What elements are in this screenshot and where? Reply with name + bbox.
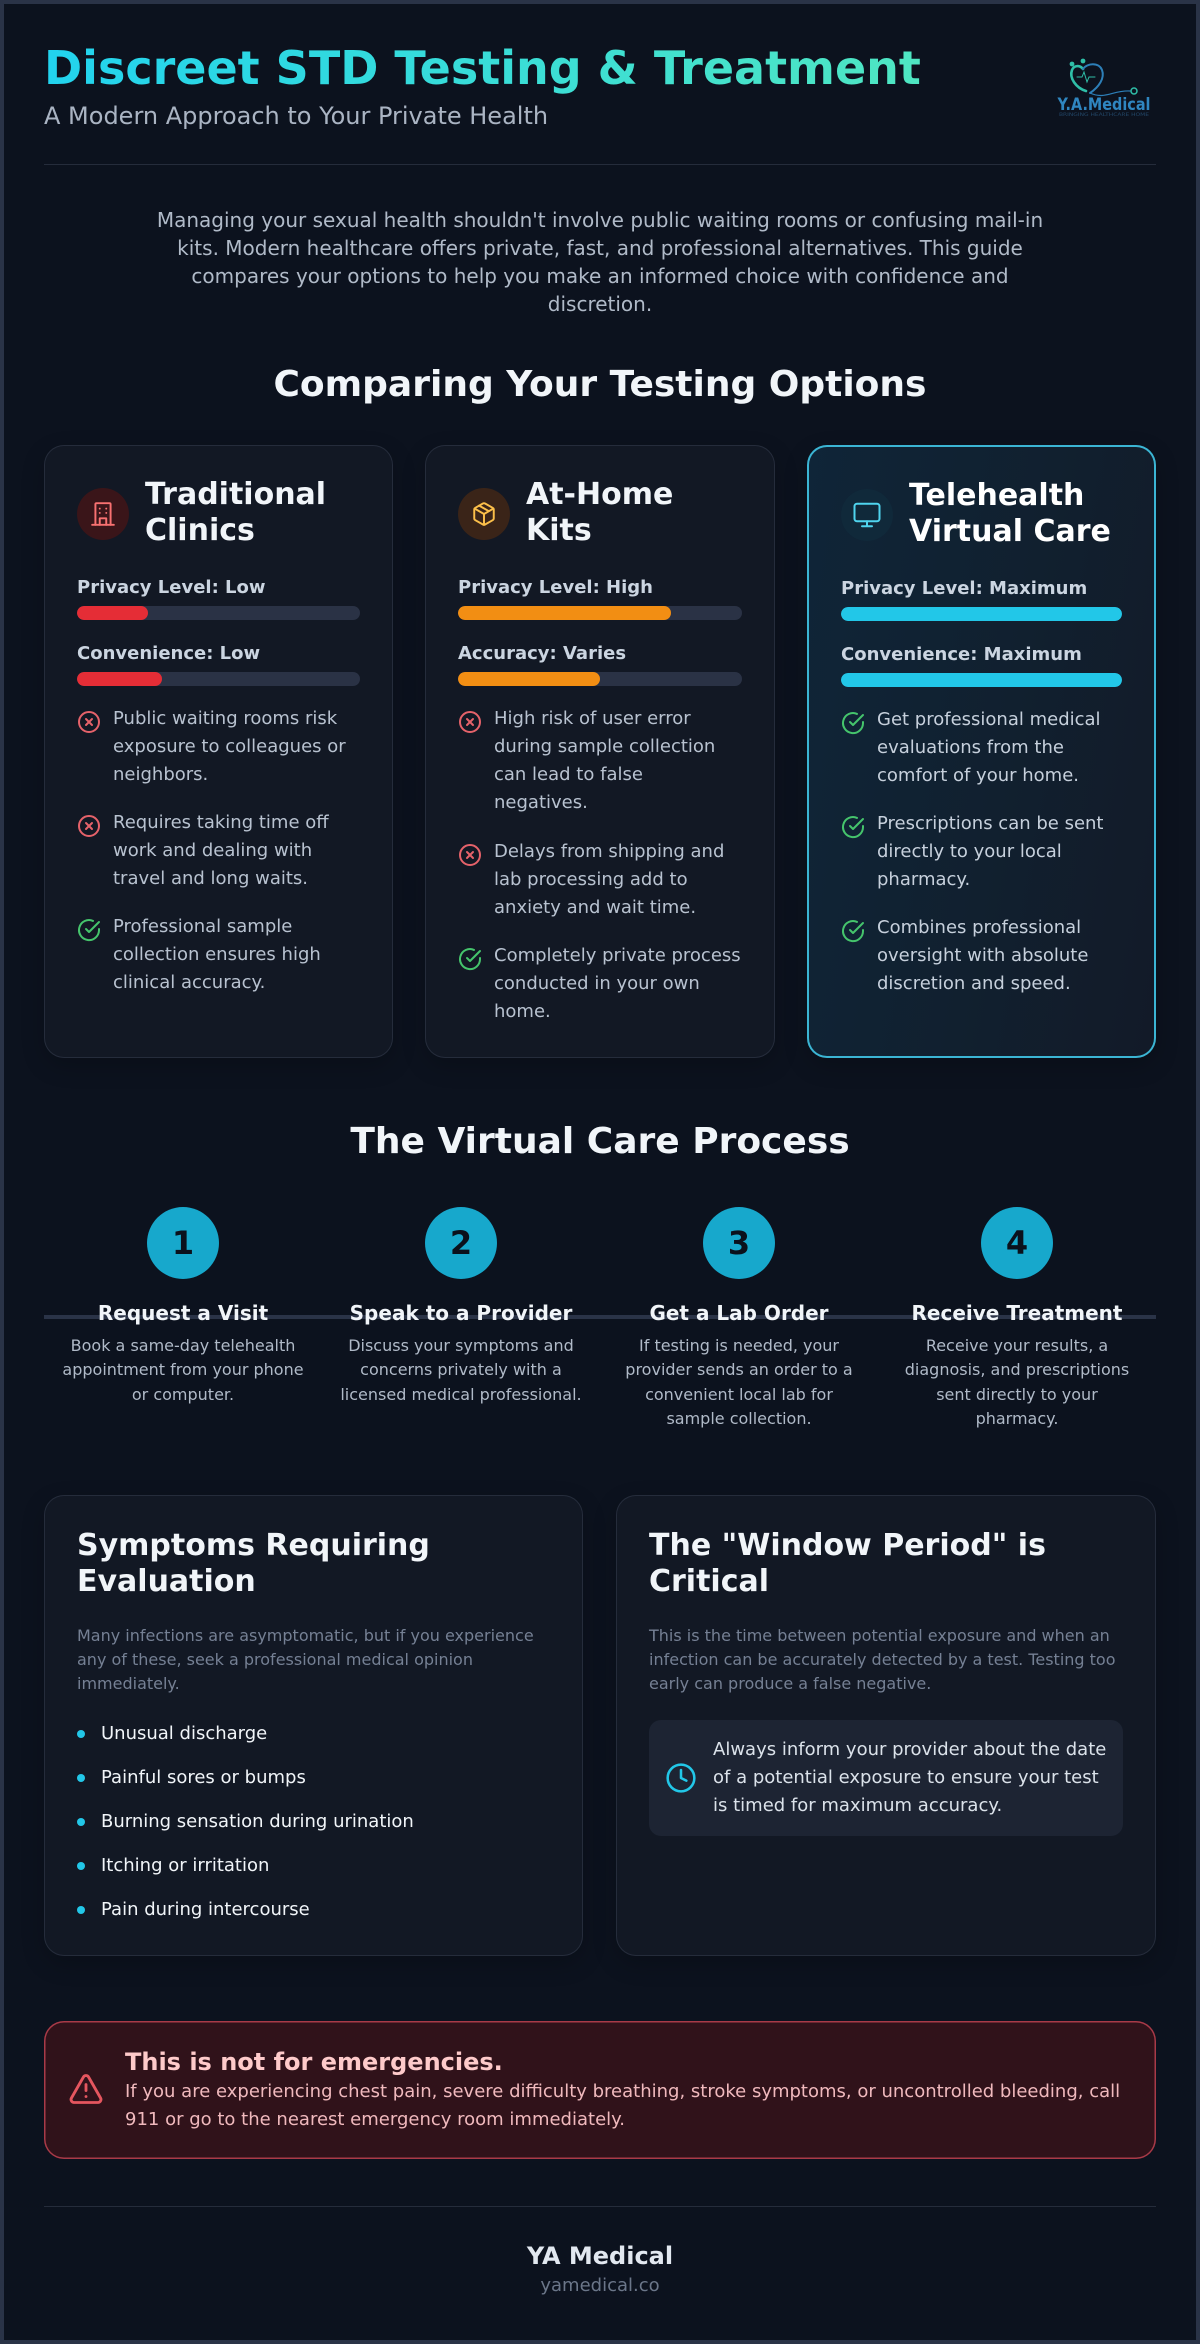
logo (1057, 58, 1150, 117)
point text: evaluations from the (877, 736, 1064, 758)
panel description: early can produce a false negative. (649, 1674, 931, 1693)
step 4 number: 4 (1006, 1224, 1028, 1262)
process connector line (44, 1315, 1156, 1319)
step 4 number (981, 1207, 1053, 1279)
point text: Combines professional (877, 916, 1081, 938)
icon: clinic building (77, 488, 129, 540)
panel: at-home kits (425, 445, 775, 1058)
panel description: This is the time between potential exposure and when an (649, 1626, 1110, 1645)
symptom bullet (77, 1818, 85, 1826)
icon: cross (78, 711, 100, 733)
step 2 description: concerns privately with a (360, 1360, 562, 1379)
point text: Get professional medical (877, 708, 1101, 730)
step 1 description: appointment from your phone (62, 1360, 304, 1379)
step 3 title: Get a Lab Order (649, 1301, 829, 1325)
card title (909, 478, 1111, 549)
point text (494, 944, 741, 1022)
panel description (77, 1626, 534, 1693)
point text (494, 840, 724, 918)
step 2 number: 2 (450, 1224, 472, 1262)
point text (877, 812, 1104, 890)
point text: oversight with absolute (877, 944, 1088, 966)
rating bar: privacy (458, 606, 742, 620)
symptom bullet (77, 1774, 85, 1782)
icon: monitor (841, 489, 893, 541)
header title: Discreet STD Testing & Treatment (44, 41, 921, 95)
callout text: Always inform your provider about the date (713, 1738, 1106, 1760)
step 2 description: licensed medical professional. (340, 1385, 582, 1404)
rating bar: privacy (77, 606, 360, 620)
panel heading: The "Window Period" is (649, 1528, 1046, 1562)
card title: Kits (526, 513, 592, 548)
point text (113, 812, 329, 888)
step 3 description: provider sends an order to a (625, 1360, 853, 1379)
intro paragraph (157, 208, 1043, 316)
step 4 description: Receive your results, a (926, 1336, 1108, 1355)
point text (113, 708, 346, 784)
panel heading (649, 1528, 1046, 1598)
step 1 description (62, 1336, 304, 1404)
step 3 number: 3 (728, 1224, 750, 1262)
symptom text: Painful sores or bumps (101, 1766, 306, 1788)
point text: clinical accuracy. (113, 972, 265, 992)
icon: cross (78, 815, 100, 837)
point text (877, 916, 1088, 994)
panel description: infection can be accurately detected by a test. Testing too (649, 1650, 1116, 1669)
rating bar: privacy (841, 607, 1122, 621)
footer url: yamedical.co (540, 2275, 660, 2296)
heading: process: The Virtual Care Process (350, 1121, 850, 1162)
icon: cross (459, 711, 481, 733)
panel description (648, 1626, 1116, 1693)
callout text (713, 1738, 1106, 1816)
symptom bullet (77, 1906, 85, 1914)
rating label: privacy: Privacy Level: High (458, 577, 653, 598)
point text: home. (494, 1000, 551, 1022)
step 4 description (905, 1336, 1129, 1428)
intro paragraph: Managing your sexual health shouldn't involve public waiting rooms or confusing mail-in (157, 208, 1043, 232)
intro paragraph: kits. Modern healthcare offers private, fast, and professional alternatives. This guide (177, 236, 1023, 260)
heading: comparing options: Comparing Your Testing Options (274, 364, 926, 405)
footer brand: YA Medical (527, 2242, 673, 2270)
point text: collection ensures high (113, 944, 321, 964)
alert text (125, 2081, 1120, 2130)
step 1 description: Book a same-day telehealth (71, 1336, 295, 1355)
icon: package (458, 488, 510, 540)
panel description: immediately. (77, 1674, 180, 1693)
step 4 description: pharmacy. (976, 1409, 1058, 1428)
panel heading: Evaluation (77, 1564, 256, 1598)
panel heading (77, 1528, 430, 1598)
point text: pharmacy. (877, 868, 970, 890)
point text: neighbors. (113, 764, 208, 784)
panel: telehealth virtual care (807, 445, 1156, 1058)
card title (145, 477, 326, 548)
footer divider (44, 2206, 1156, 2207)
step 3 description: convenient local lab for (645, 1385, 833, 1404)
step 2 description: Discuss your symptoms and (348, 1336, 574, 1355)
intro paragraph: compares your options to help you make an informed choice with confidence and (191, 264, 1009, 288)
step 2 title: Speak to a Provider (350, 1301, 572, 1325)
point text: conducted in your own (494, 972, 700, 994)
icon: check (842, 920, 864, 942)
logo: BRINGING HEALTHCARE HOME (1059, 112, 1150, 117)
symptom bullet (77, 1862, 85, 1870)
point text: can lead to false (494, 764, 643, 784)
point text: comfort of your home. (877, 764, 1079, 786)
symptom text: Burning sensation during urination (101, 1810, 414, 1832)
panel description: any of these, seek a professional medical opinion (77, 1650, 473, 1669)
point text (113, 916, 321, 992)
header divider (44, 164, 1156, 165)
alert text: 911 or go to the nearest emergency room immediately. (125, 2109, 625, 2130)
card title: Traditional (145, 477, 326, 512)
step 3 description (625, 1336, 853, 1428)
point text: High risk of user error (494, 708, 691, 728)
rating label: convenience: Convenience: Low (77, 643, 260, 664)
symptom bullet (77, 1730, 85, 1738)
point text: anxiety and wait time. (494, 896, 696, 918)
icon: check (78, 919, 100, 942)
rating bar: accuracy (458, 672, 742, 686)
step 1 title: Request a Visit (98, 1301, 268, 1325)
callout box (649, 1720, 1123, 1836)
panel: traditional clinics (44, 445, 393, 1058)
point text: exposure to colleagues or (113, 736, 346, 756)
point text: during sample collection (494, 736, 715, 756)
panel: symptoms (44, 1495, 583, 1956)
point text: Public waiting rooms risk (113, 708, 337, 728)
step 1 number: 1 (172, 1224, 194, 1262)
point text: work and dealing with (113, 840, 312, 860)
card title: Virtual Care (909, 514, 1111, 549)
card title: At-Home (526, 477, 673, 512)
step 2 description (340, 1336, 582, 1404)
point text: Professional sample (113, 916, 292, 936)
card title: Clinics (145, 513, 255, 548)
step 2 number (425, 1207, 497, 1279)
callout text: is timed for maximum accuracy. (713, 1794, 1002, 1816)
step 4 description: sent directly to your (936, 1385, 1098, 1404)
alert text: If you are experiencing chest pain, severe difficulty breathing, stroke symptoms, or uncontrolled bleeding, call (125, 2081, 1120, 2102)
alert title: This is not for emergencies. (125, 2048, 503, 2076)
icon: check (842, 816, 864, 838)
step 3 number (703, 1207, 775, 1279)
step 3 description: sample collection. (666, 1409, 812, 1428)
rating label: accuracy: Accuracy: Varies (458, 643, 626, 664)
point text: negatives. (494, 792, 588, 812)
intro paragraph: discretion. (548, 292, 652, 316)
step 3 description: If testing is needed, your (639, 1336, 839, 1355)
point text: directly to your local (877, 840, 1062, 862)
rating label: convenience: Convenience: Maximum (841, 644, 1082, 664)
header subtitle: A Modern Approach to Your Private Health (44, 102, 548, 130)
point text: Prescriptions can be sent (877, 812, 1104, 834)
panel heading: Critical (649, 1564, 769, 1598)
rating bar: convenience (77, 672, 360, 686)
step 4 title: Receive Treatment (912, 1301, 1122, 1325)
rating bar: convenience (841, 673, 1122, 687)
callout text: of a potential exposure to ensure your test (713, 1766, 1099, 1788)
point text (494, 708, 715, 812)
step 1 number (147, 1207, 219, 1279)
panel: window period (616, 1495, 1156, 1956)
icon: clock (666, 1763, 696, 1793)
point text: Requires taking time off (113, 812, 329, 832)
icon: check (842, 712, 864, 734)
emergency alert banner (44, 2021, 1156, 2159)
icon: cross (459, 844, 481, 866)
point text: discretion and speed. (877, 972, 1071, 994)
step 4 description: diagnosis, and prescriptions (905, 1360, 1129, 1379)
panel heading: Symptoms Requiring (77, 1528, 430, 1562)
point text: lab processing add to (494, 868, 688, 890)
point text: travel and long waits. (113, 868, 308, 888)
rating label: privacy: Privacy Level: Maximum (841, 578, 1087, 598)
point text (877, 708, 1101, 786)
panel description: Many infections are asymptomatic, but if you experience (77, 1626, 534, 1645)
card title: Telehealth (909, 478, 1084, 513)
symptom text: Pain during intercourse (101, 1898, 310, 1920)
icon: check (458, 948, 481, 970)
point text: Delays from shipping and (494, 840, 724, 862)
step 1 description: or computer. (132, 1385, 234, 1404)
symptom text: Unusual discharge (101, 1722, 267, 1744)
symptom text: Itching or irritation (101, 1854, 269, 1876)
rating label: privacy: Privacy Level: Low (77, 577, 266, 598)
card title (526, 477, 673, 548)
icon: warning (70, 2074, 102, 2104)
point text: Completely private process (494, 944, 741, 966)
